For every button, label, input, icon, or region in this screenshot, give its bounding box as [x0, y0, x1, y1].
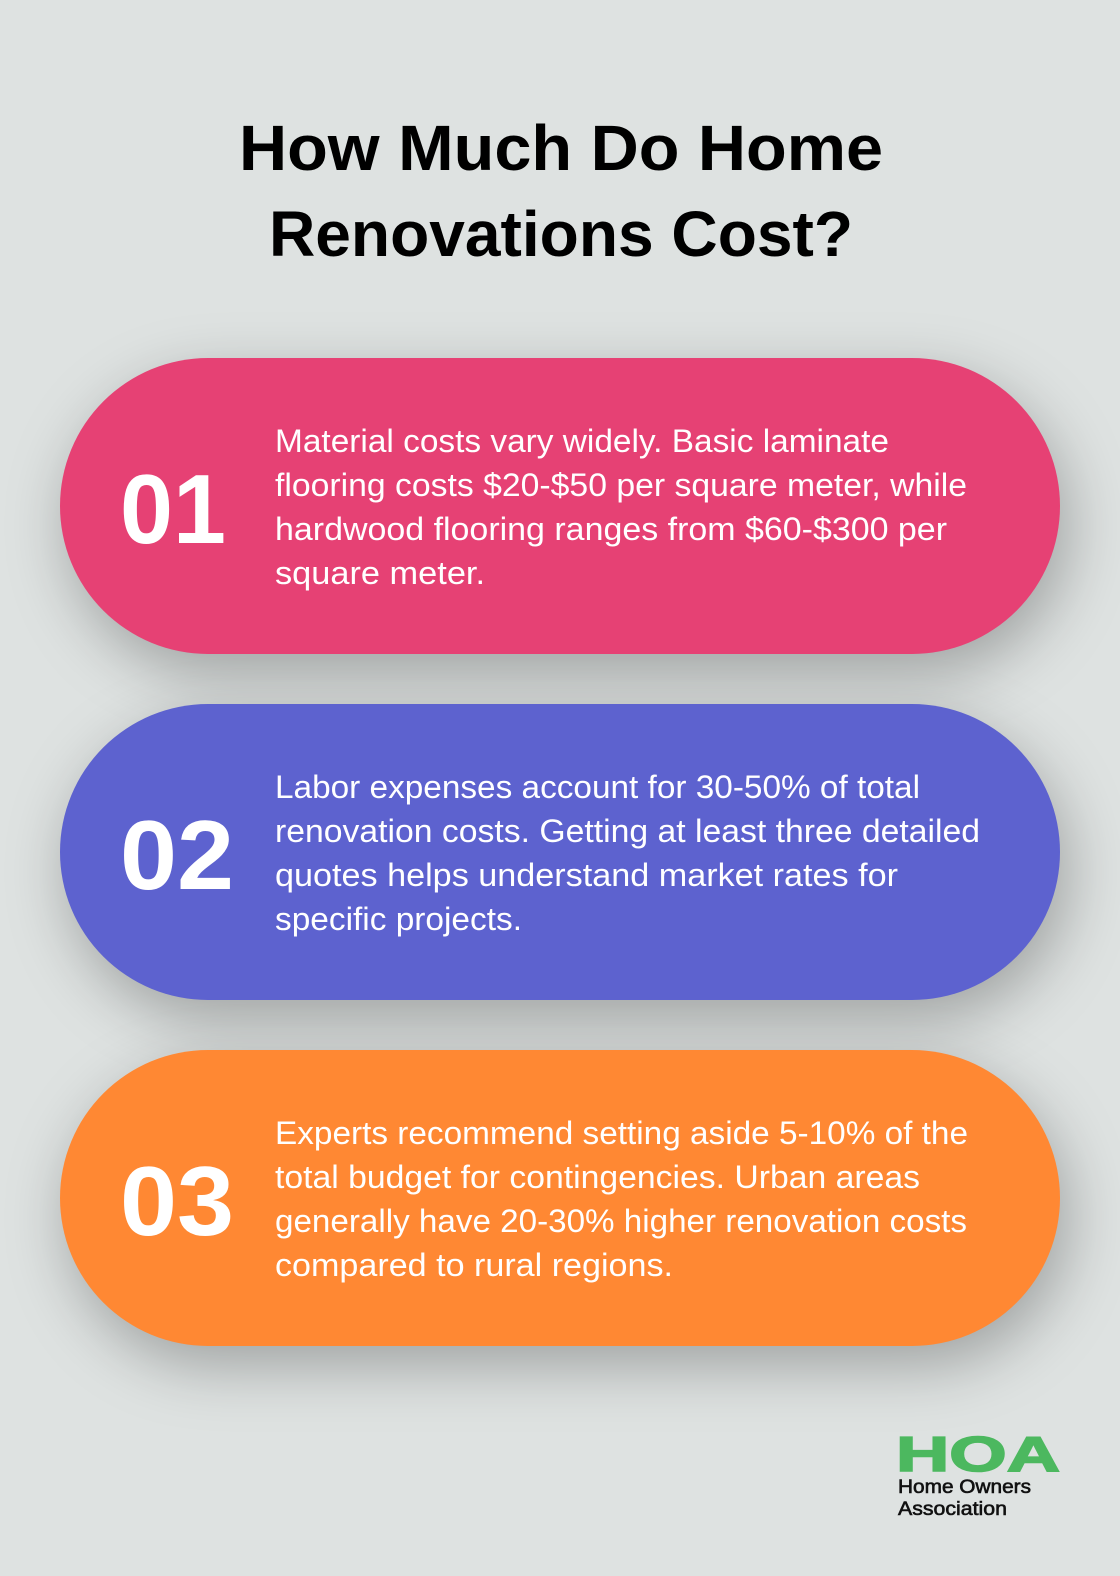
orange pill: [60, 1050, 1060, 1346]
text: experts recommend: generally have 20-30% higher renovation costs: [275, 1203, 967, 1239]
text: material costs: [275, 423, 967, 591]
title: Renovations Cost?: [269, 198, 853, 270]
logo: HOA Home Owners Association: [896, 1428, 1060, 1520]
text: material costs: square meter.: [275, 555, 485, 591]
logo mark: HOA: [896, 1428, 1060, 1482]
number 03: 03: [120, 1146, 234, 1256]
text: experts recommend: compared to rural regions.: [275, 1247, 673, 1283]
blue pill: [60, 704, 1060, 1000]
number 01: 01: [120, 454, 226, 564]
number 02: 02: [120, 800, 234, 910]
title: [239, 112, 883, 270]
text: material costs: Material costs vary widely. Basic laminate: [275, 423, 889, 459]
panel: step 02: [60, 704, 1060, 1000]
text: labor expenses: renovation costs. Getting at least three detailed: [275, 813, 980, 849]
logo wordmark: Association: [898, 1499, 1007, 1520]
panel: step 01: [60, 358, 1060, 654]
text: experts recommend: [275, 1115, 968, 1283]
panel: step 03: [60, 1050, 1060, 1346]
text: labor expenses: specific projects.: [275, 901, 522, 937]
title: How Much Do Home: [239, 112, 883, 184]
pink pill: [60, 358, 1060, 654]
text: material costs: hardwood flooring ranges from $60-$300 per: [275, 511, 947, 547]
text: experts recommend: Experts recommend setting aside 5-10% of the: [275, 1115, 968, 1151]
text: material costs: flooring costs $20-$50 per square meter, while: [275, 467, 967, 503]
text: labor expenses: quotes helps understand market rates for: [275, 857, 898, 893]
text: labor expenses: Labor expenses account for 30-50% of total: [275, 769, 920, 805]
logo wordmark: [898, 1477, 1031, 1520]
text: labor expenses: [275, 769, 980, 937]
text: experts recommend: total budget for contingencies. Urban areas: [275, 1159, 920, 1195]
logo wordmark: Home Owners: [898, 1477, 1031, 1498]
